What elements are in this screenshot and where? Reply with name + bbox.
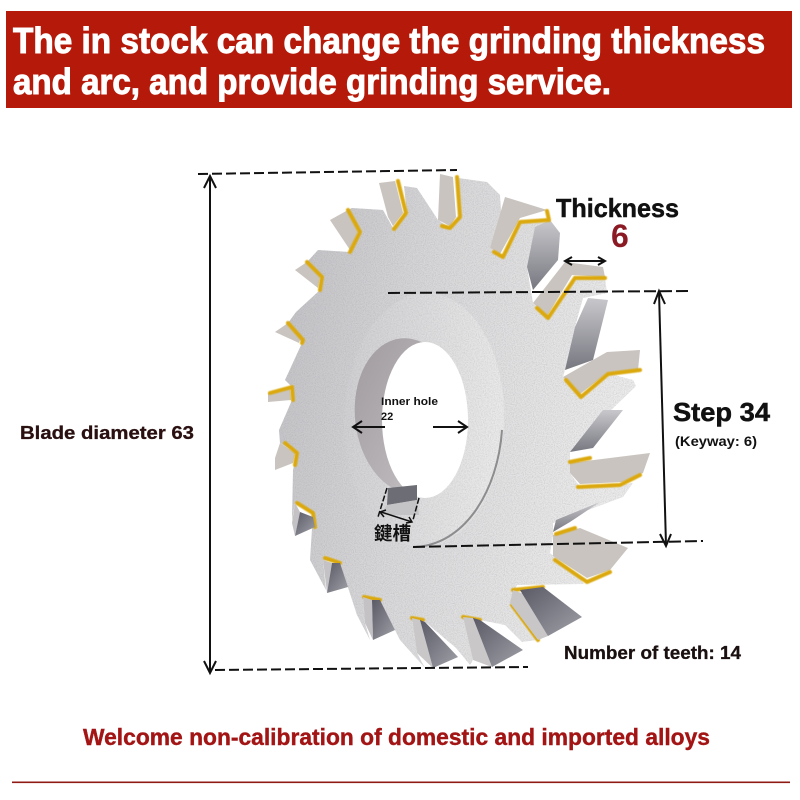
bottom rule bbox=[12, 782, 790, 783]
thickness arrow bbox=[565, 257, 605, 265]
keyway dimension marks bbox=[378, 488, 419, 523]
top diameter dashed line bbox=[198, 170, 457, 174]
blade diameter label: Blade diameter 63 bbox=[20, 422, 194, 443]
step label: Step 34 bbox=[673, 397, 771, 427]
title text: and arc, and provide grinding service. bbox=[13, 61, 611, 102]
keyway chinese label: 鍵槽 bbox=[374, 523, 411, 544]
teeth: gold brazing bbox=[270, 177, 640, 640]
step arrow bbox=[654, 291, 671, 546]
teeth: lower inserts bbox=[292, 503, 582, 668]
inner hole arrows bbox=[353, 421, 467, 433]
title text bbox=[13, 20, 765, 102]
keyway notch bbox=[380, 485, 419, 515]
step dashed line top bbox=[388, 291, 690, 293]
raised centre ring bbox=[340, 290, 508, 550]
thickness value: 6 bbox=[611, 218, 629, 254]
teeth: rear faces bbox=[527, 220, 623, 532]
title banner bbox=[6, 11, 792, 108]
ring edge shadow bbox=[413, 430, 502, 547]
step dashed line bottom bbox=[413, 541, 703, 547]
centre hole wall bbox=[347, 333, 471, 499]
inner hole label bbox=[381, 396, 438, 423]
centre hole bbox=[382, 342, 468, 498]
thickness label: Thickness bbox=[556, 193, 679, 223]
bottom slogan: Welcome non-calibration of domestic and imported alloys bbox=[83, 724, 710, 750]
bottom diameter dashed line bbox=[215, 667, 528, 670]
teeth: top inserts bbox=[268, 174, 650, 578]
inner hole label: 22 bbox=[381, 411, 393, 423]
saw blade bbox=[268, 174, 650, 668]
number of teeth label: Number of teeth: 14 bbox=[564, 642, 742, 663]
inner hole label: Inner hole bbox=[381, 396, 438, 408]
diameter arrow bbox=[204, 176, 216, 673]
keyway label: (Keyway: 6) bbox=[675, 433, 757, 449]
